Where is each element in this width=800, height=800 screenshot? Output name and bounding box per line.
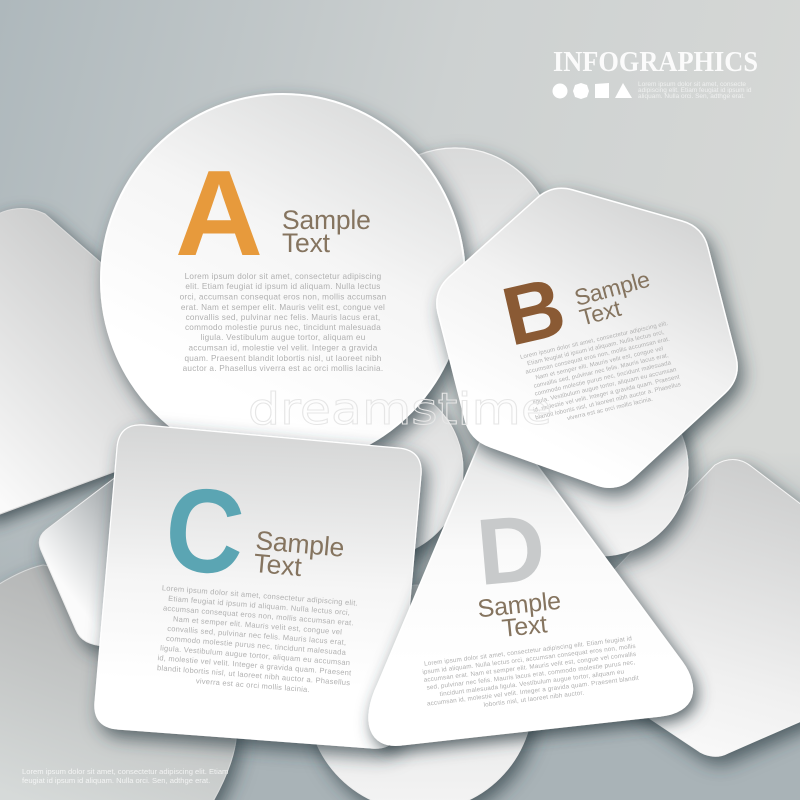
body B: commodo molestie purus nec, tincidunt malesuada xyxy=(534,360,672,398)
body C xyxy=(155,583,358,697)
panel A circle xyxy=(101,94,465,466)
body D: sed, pulvinar nec felis. Mauris lacus erat, commodo molestie purus nec, xyxy=(426,659,636,692)
icon: circle xyxy=(552,84,568,98)
body D: accumsan id, molestie vel velit. Integer a gravida quam. Praesent blandit xyxy=(427,675,639,708)
letter B: B xyxy=(494,259,573,364)
body B: Nam et semper elit. Mauris velit est, congue vel xyxy=(535,346,664,381)
body A: ligula. Vestibulum augue tortor, aliquam eu xyxy=(200,333,366,342)
body C: commodo molestie purus nec, tincidunt malesuada xyxy=(166,634,347,657)
body B: convallis sed, pulvinar nec felis. Mauris lacus erat, xyxy=(533,353,670,390)
icon: heptagon xyxy=(573,83,589,99)
body A: accumsan id, molestie vel velit. Integer a gravida xyxy=(188,344,378,352)
back shape: bottom circle xyxy=(307,585,533,800)
body B: ligula. Vestibulum augue tortor, aliquam eu accumsan xyxy=(532,367,677,406)
body D: Lorem ipsum dolor sit amet, consectetur adipiscing elit. Etiam feugiat id xyxy=(424,635,633,668)
body A: orci, accumsan consequat eros non, mollis accumsan xyxy=(180,292,387,302)
body D: tincidunt malesuada ligula. Vestibulum augue tortor, aliquam eu xyxy=(439,668,625,698)
body D xyxy=(421,635,641,716)
letter A: A xyxy=(175,145,263,281)
panel A xyxy=(101,94,465,466)
body D: lobortis nisl, ut laoreet nibh auctor. xyxy=(483,689,585,709)
heading C: Text xyxy=(252,548,304,582)
body C: Nam et semper elit. Mauris velit est, congue vel xyxy=(173,614,343,637)
back shape: left pentagon xyxy=(0,209,200,520)
body D: accumsan erat. Nam et semper elit. Mauris velit est, congue vel convallis xyxy=(423,651,637,684)
back shape: center circle xyxy=(287,382,463,558)
body B: id, molestie vel velit. Integer a gravida quam. Praesent xyxy=(533,374,680,414)
body C: viverra est ac orci mollis lacinia. xyxy=(196,676,310,694)
body C: blandit lobortis nisl, ut laoreet nibh auctor a. Phasellus xyxy=(157,663,351,687)
back shape: right pentagon xyxy=(560,459,800,756)
back shape: small hexagon behind C xyxy=(39,470,125,646)
body A: convallis sed, pulvinar nec felis. Mauris lacus erat, xyxy=(186,313,380,322)
heading B: Text xyxy=(577,295,624,331)
footer text: feugiat id ipsum id aliquam. Nulla orci. Sen, adthge erat. xyxy=(22,776,210,785)
body C: Etiam feugiat id ipsum id aliquam. Nulla lectus orci, xyxy=(168,594,350,617)
heading D: Sample xyxy=(476,587,562,623)
subtitle text: Lorem ipsum dolor sit amet, consecte xyxy=(638,81,746,88)
footer text: Lorem ipsum dolor sit amet, consectetur adipiscing elit. Etiam xyxy=(22,767,228,776)
title: INFOGRAPHICS xyxy=(553,46,758,78)
body B: Etiam feugiat id ipsum id aliquam. Nulla lectus orci, xyxy=(527,330,665,367)
body B: accumsan consequat eros non, mollis accumsan erat. xyxy=(525,337,671,376)
back shape: circle behind hexagon xyxy=(512,380,688,556)
letter C: C xyxy=(161,463,248,601)
back shape: lower-left circle xyxy=(0,565,236,800)
body A: elit. Etiam feugiat id ipsum id aliquam. Nulla lectus xyxy=(185,282,381,291)
body A: auctor a. Phasellus viverra est ac orci mollis lacinia. xyxy=(183,364,383,373)
subtitle text: aliquam. Nulla orci. Sen, adthge erat. xyxy=(638,93,745,100)
body B xyxy=(520,321,685,429)
icon: triangle xyxy=(615,83,632,98)
body C: Lorem ipsum dolor sit amet, consectetur adipiscing elit. xyxy=(162,583,358,608)
body A: erat. Nam et semper elit. Mauris velit est, congue vel xyxy=(181,303,385,312)
icon: square xyxy=(595,83,609,98)
subtitle text: adipiscing elit. Etiam feugiat id ipsum id xyxy=(638,87,752,94)
body A: commodo molestie purus nec, tincidunt malesuada xyxy=(185,323,381,332)
body B: viverra est ac orci mollis lacinia. xyxy=(567,397,654,422)
letter D: D xyxy=(473,494,549,605)
panel C xyxy=(95,425,421,748)
body B: blandit lobortis nisl, ut laoreet nibh auctor a. Phasellus xyxy=(535,382,682,421)
body C: accumsan consequat eros non, mollis accumsan erat. xyxy=(163,603,354,627)
body B: Lorem ipsum dolor sit amet, consectetur adipiscing elit. xyxy=(520,321,669,361)
body A: Lorem ipsum dolor sit amet, consectetur adipiscing xyxy=(185,272,382,281)
body D: ipsum id aliquam. Nulla lectus orci, accumsan consequat eros non, mollis xyxy=(422,643,636,676)
panel D xyxy=(369,417,692,745)
back shape: top circle xyxy=(356,148,554,346)
heading B: Sample xyxy=(572,266,652,311)
body C: id, molestie vel velit. Integer a gravida quam. Praesent xyxy=(157,653,352,677)
watermark: dreamstime xyxy=(248,384,552,435)
panel B hexagon xyxy=(437,188,737,487)
panel B xyxy=(437,188,737,487)
heading D: Text xyxy=(501,610,549,643)
panel C card xyxy=(95,425,421,748)
body A: quam. Praesent blandit lobortis nisl, ut laoreet nibh xyxy=(184,354,382,363)
panel D card xyxy=(369,417,692,745)
heading A: Text xyxy=(282,228,331,258)
body C: convallis sed, pulvinar nec felis. Mauris lacus erat, xyxy=(167,624,347,647)
body C: ligula. Vestibulum augue tortor, aliquam eu accumsan xyxy=(160,643,351,667)
heading C: Sample xyxy=(254,525,345,563)
heading A: Sample xyxy=(282,205,371,235)
